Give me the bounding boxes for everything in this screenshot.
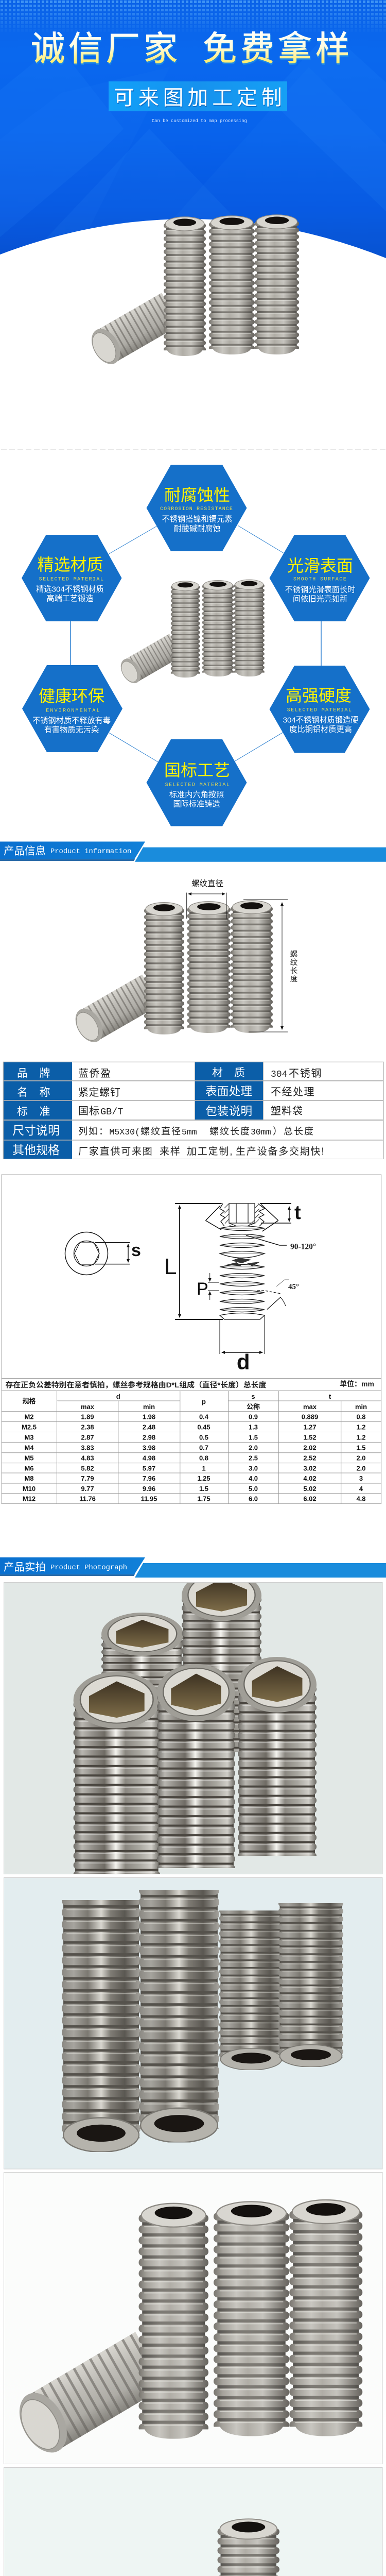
technical drawing: side view: P [197,1279,208,1299]
row: size description: 5mm [182,1127,197,1137]
heading: product photographs [0,1557,386,1578]
table rows: 0.4 [199,1413,209,1420]
hexagon: corrosion resistance: 耐腐蚀性 [164,486,230,504]
photo: four screws, socket end down [4,1877,383,2170]
hexagon: smooth surface: 光滑表面 [287,556,353,575]
hexagon: environmental: 不锈钢材质不释放有毒 [32,716,111,725]
table rows: 0.7 [199,1444,208,1452]
label: thread diameter [187,879,226,919]
hexagon: high hardness: SELECTED MATERIAL [287,707,352,713]
row: size description: 总长度 [284,1126,314,1137]
table rows: 0.8 [199,1454,208,1462]
connector lines [71,526,321,762]
table rows: 2.38 [81,1423,94,1431]
row: name and surface treatment [4,1081,383,1100]
table rows: 2.48 [143,1423,155,1431]
row: size description: 30mm [251,1127,271,1137]
heading: product photographs: 产品实拍 [4,1561,46,1573]
english subtitle: Can be customized to map processing [152,118,247,124]
table grid [2,1378,381,1504]
hexagon: high hardness: 304不锈钢材质锻造硬 [283,716,358,724]
table rows: 2.52 [303,1454,317,1462]
table rows: 5.82 [81,1464,94,1472]
row: standard and packaging: 塑料袋 [271,1105,303,1117]
row: other specifications: 生产设备多交期快! [236,1146,325,1157]
table header: t [329,1393,331,1400]
row: other specifications: 其他规格 [12,1143,60,1157]
table rows: 2.87 [81,1434,94,1442]
row: brand and material: 品 [17,1067,28,1079]
hexagon: national standard craft: 标准内六角按照 [169,790,224,800]
table rows: 11.76 [79,1495,96,1503]
table rows: 4.98 [143,1454,155,1462]
table rows: 1.2 [356,1434,366,1442]
hexagon: smooth surface: SMOOTH SURFACE [293,577,347,582]
table rows: 1.2 [356,1423,366,1431]
table rows: M2.5 [22,1423,37,1431]
table rows: 5.02 [303,1485,317,1493]
table rows: 5.0 [249,1485,258,1493]
hexagon: environmental: ENVIRONMENTAL [46,708,101,714]
hexagon: smooth surface: 不锈钢光滑表面长时 [285,585,355,595]
row: brand and material: 蓝侨盈 [78,1067,111,1079]
table rows: 3.83 [81,1444,94,1452]
table rows: M5 [24,1454,34,1462]
table rows: M10 [23,1485,36,1493]
title [31,29,353,67]
table rows: 3 [359,1475,363,1482]
row: size description: 螺纹直径 [141,1126,182,1137]
table rows: 11.95 [141,1495,157,1503]
table rows: 4.8 [356,1495,366,1503]
row: other specifications: 加工定制, [187,1146,233,1157]
table rows: 0.45 [197,1423,210,1431]
row: brand and material: 质 [234,1067,245,1079]
panel: hero banner [0,0,386,364]
table rows: 2.98 [143,1434,155,1442]
row: other specifications: 来样 [160,1146,181,1157]
table rows: 4.02 [303,1475,317,1482]
row: size description: 列如： [78,1126,109,1137]
row: name and surface treatment: 称 [39,1087,50,1098]
technical drawing: side view: d [237,1350,250,1374]
title: 免费拿样 [203,29,353,67]
table header: s [251,1393,255,1400]
table rows: 1 [202,1464,206,1472]
row: name and surface treatment: 表面处理 [205,1084,252,1098]
note line: 存在正负公差特别在意者慎拍，螺丝参考规格由D*L组成（直径*长度）总长度 [5,1381,267,1389]
table rows: 2.0 [356,1464,366,1472]
heading: product photographs: Product Photograph [50,1564,127,1572]
label: thread length [243,900,298,1032]
photo: five screws from above [4,1570,383,1874]
hexagon: smooth surface: 间依旧光亮如新 [293,595,347,604]
table rows: 1.25 [197,1475,210,1482]
hexagon: smooth surface [270,535,370,621]
technical drawing: side view: L [164,1254,177,1279]
hexagon: environmental: 健康环保 [39,687,104,705]
table rows: M12 [23,1495,36,1503]
table rows: 7.79 [81,1475,94,1482]
hexagon: national standard craft: 国标工艺 [164,761,230,779]
hexagon: national standard craft: SELECTED MATERIAL [165,782,230,788]
table rows: 7.96 [143,1475,155,1482]
row: brand and material: 不锈钢 [289,1067,322,1079]
white arc [0,219,386,438]
table rows: 9.77 [81,1485,94,1493]
label: thread length: 度 [290,975,297,984]
technical drawing: end view [65,1232,141,1275]
table rows: 6.0 [249,1495,258,1503]
table rows: M3 [24,1434,34,1442]
table rows: 1.27 [303,1423,317,1431]
product photo: three standing screws and one lying [86,215,299,369]
row: brand and material: 材 [212,1067,223,1079]
row: size description [4,1121,383,1140]
table header: min [355,1403,367,1411]
table rows: 2.0 [249,1444,258,1452]
table header: d [116,1393,120,1400]
table header: max [81,1403,95,1411]
row: size description: 螺纹长度 [209,1126,251,1137]
table rows: 2.5 [249,1454,258,1462]
row: size description: ） [273,1126,283,1137]
dashed separator [1,449,386,450]
spec table [3,1062,383,1159]
row: standard and packaging: 包装说明 [205,1105,252,1118]
table rows: 1.98 [143,1413,155,1420]
hexagon: corrosion resistance: 耐酸碱耐腐蚀 [173,524,221,533]
table rows: 5.97 [143,1464,155,1472]
hexagon: corrosion resistance [146,465,247,551]
row: name and surface treatment: 不经处理 [271,1086,315,1098]
label: thread length: 纹 [290,958,298,967]
technical drawing: side view: 45° [288,1283,299,1291]
row: standard and packaging: GB/T [100,1107,123,1117]
technical drawing: end view: s [131,1241,141,1260]
heading: product information [0,842,386,862]
photo: one standing and one short screw [4,2468,382,2576]
table rows: 6.02 [303,1495,317,1503]
table rows: 2.02 [303,1444,317,1452]
table rows: 1.5 [249,1434,258,1442]
hexagon: selected material: 高端工艺锻造 [46,595,94,603]
row: other specifications [4,1141,383,1159]
table rows: 1.89 [81,1413,94,1420]
table rows: 3.0 [249,1464,258,1472]
row: standard and packaging: 标 [17,1106,28,1118]
table rows [22,1413,366,1503]
row: size description: 尺寸说明 [12,1124,60,1137]
hexagon: corrosion resistance: 不锈钢搭镍和镉元素 [162,514,232,523]
hexagon: high hardness: 度比铜铝材质更高 [289,725,352,734]
table rows: M4 [24,1444,34,1452]
row: name and surface treatment: 紧定螺钉 [78,1087,120,1098]
table rows: 4 [359,1485,363,1493]
hexagon: high hardness: 高强硬度 [286,686,352,705]
table header: p [202,1398,206,1405]
row: brand and material: 304 [271,1070,287,1080]
hexagon: environmental: 有害物质无污染 [44,725,99,735]
table rows: 4.83 [81,1454,94,1462]
row: standard and packaging: 国标 [78,1105,100,1117]
table header: 规格 [22,1397,36,1405]
row: brand and material: 牌 [39,1067,50,1079]
product photo [70,901,273,1047]
table rows: M2 [24,1413,34,1420]
hexagon: national standard craft: 国际标准铸造 [173,800,220,809]
hexagon: selected material: SELECTED MATERIAL [39,577,104,582]
hexagon: national standard craft [146,739,247,826]
note line: 单位：mm [340,1380,374,1388]
table rows: 1.52 [303,1434,317,1442]
table rows: 0.8 [356,1413,366,1420]
technical drawing: side view [164,1202,316,1374]
table rows: 1.5 [199,1485,208,1493]
label: thread length: 螺 [290,950,297,959]
photo: three standing screws and one lying [4,2172,382,2464]
hero blue background [0,0,386,263]
heading: product information: 产品信息 [4,845,46,857]
hexagon: selected material: 精选材质 [37,555,103,574]
center product photo [117,580,265,687]
row: standard and packaging [4,1101,383,1120]
table rows: 1.75 [197,1495,210,1503]
row: other specifications: 厂家直供可来图 [78,1146,153,1157]
hexagon: environmental [22,665,122,752]
table rows: 4.0 [249,1475,258,1482]
hexagon: selected material: 精选304不锈钢材质 [36,585,104,594]
table rows: 9.96 [143,1485,155,1493]
panel: technical drawing and size table [2,1175,381,1504]
hexagon: selected material [22,535,121,621]
table header: max [303,1403,317,1411]
table rows: 0.889 [302,1413,318,1420]
panel: product dimensions photo [70,879,298,1047]
table rows: 2.0 [356,1454,366,1462]
hexagon: high hardness [270,666,370,753]
label: thread diameter: 螺纹直径 [191,879,223,888]
table header: 公称 [247,1403,260,1411]
table header [22,1393,367,1411]
table rows: 0.5 [199,1434,208,1442]
table rows: M6 [24,1464,34,1472]
row: size description: M5X30( [109,1127,140,1137]
table header: min [143,1403,155,1411]
panel: features hexagon ring [22,465,370,826]
label: thread length: 长 [290,967,298,975]
row: standard and packaging: 准 [39,1106,50,1118]
technical drawing: side view: t [294,1202,301,1224]
table rows: 0.9 [249,1413,258,1420]
table rows: 3.98 [143,1444,155,1452]
table rows: 1.3 [249,1423,258,1431]
table rows: 1.5 [356,1444,366,1452]
row: brand and material [4,1062,383,1080]
note line [5,1380,374,1389]
table rows: M8 [24,1475,34,1482]
row: name and surface treatment: 名 [17,1087,28,1098]
title: 诚信厂家 [31,29,181,67]
table rows: 3.02 [303,1464,317,1472]
hexagon: corrosion resistance: CORROSION RESISTANCE [160,506,233,512]
heading: product information: Product information [50,848,131,856]
subtitle banner: 可来图加工定制 [114,87,286,109]
technical drawing: side view: 90-120° [290,1243,316,1251]
